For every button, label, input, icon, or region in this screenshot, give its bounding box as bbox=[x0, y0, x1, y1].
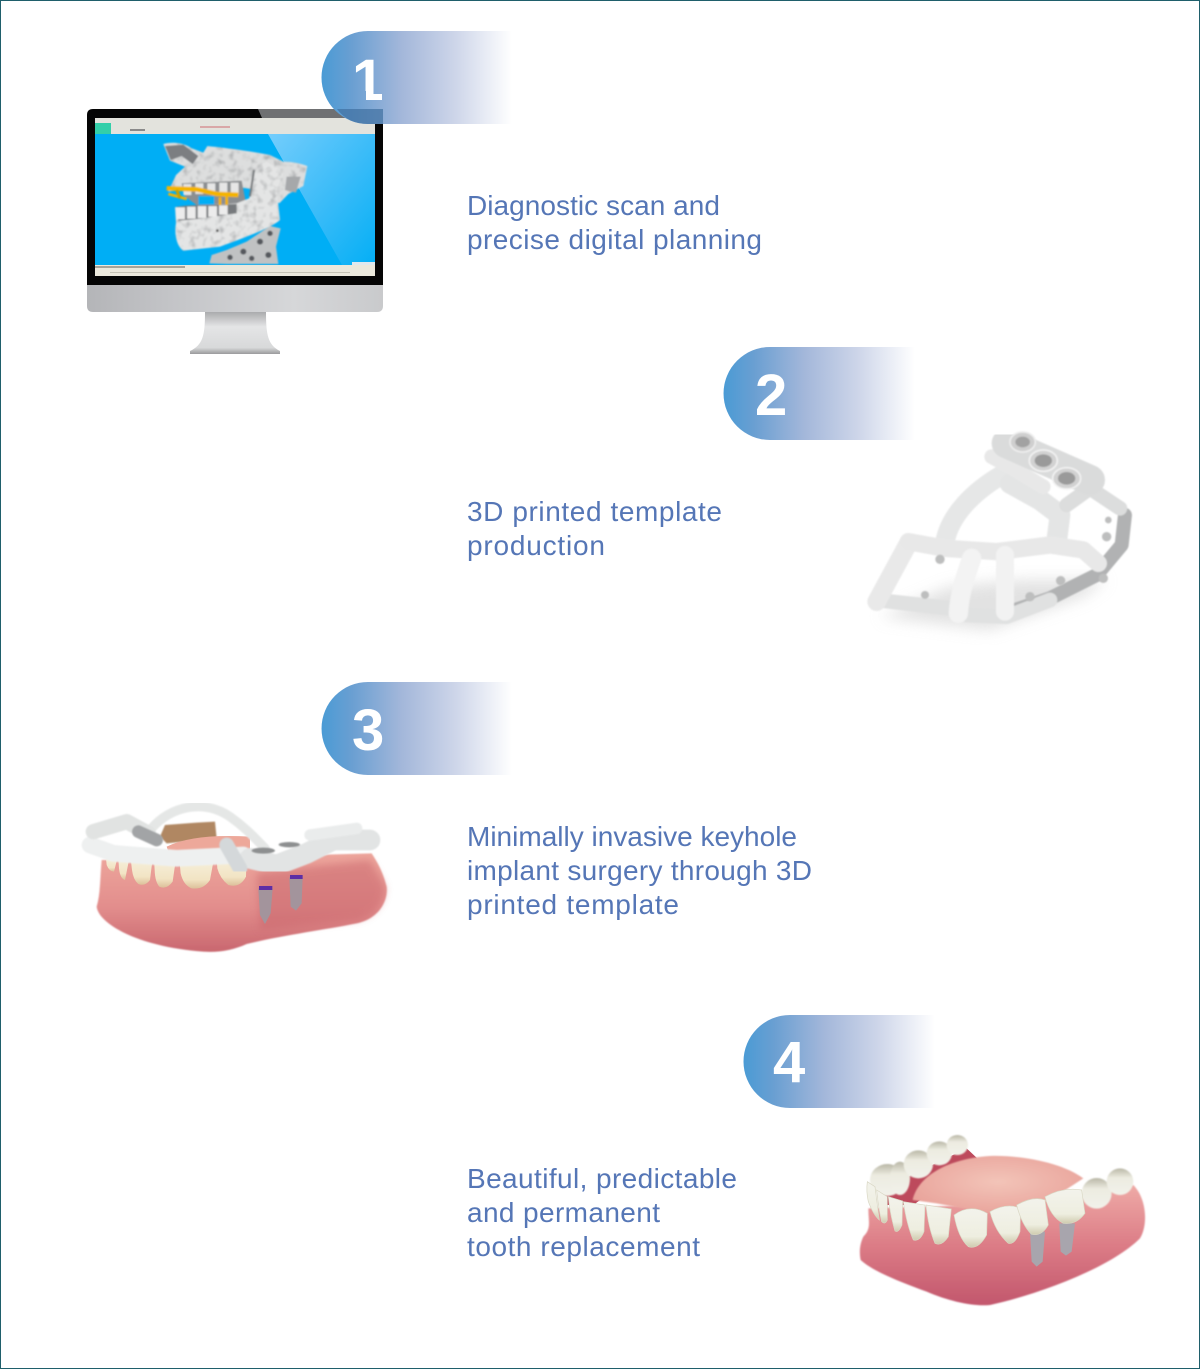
upper teeth bbox=[182, 181, 247, 207]
step 1 text: precise digital planning bbox=[467, 224, 762, 255]
monitor stand bbox=[190, 312, 280, 354]
3D skull scan bbox=[163, 143, 307, 264]
step 2 text: production bbox=[467, 530, 605, 561]
step 2 text: 3D printed template bbox=[467, 496, 722, 527]
step 4 text bbox=[467, 1163, 737, 1262]
back teeth arches bbox=[870, 1135, 1133, 1209]
upper skull bbox=[163, 143, 307, 203]
monitor chin bbox=[87, 285, 383, 312]
overlap of badge on monitor bbox=[337, 109, 383, 124]
transparent template overlay bbox=[90, 807, 370, 868]
implants bbox=[258, 875, 303, 924]
front teeth bbox=[867, 1182, 1085, 1247]
number 4: 4 bbox=[773, 1030, 805, 1095]
template shadow bbox=[880, 580, 1107, 630]
gum block bbox=[860, 1185, 1145, 1305]
neck vertebrae bbox=[209, 226, 281, 264]
monitor bezel bbox=[87, 109, 383, 285]
step 2 text bbox=[467, 496, 722, 561]
yellow surgical guide bbox=[167, 188, 238, 205]
step 4 text: and permanent bbox=[467, 1197, 660, 1228]
step 4 text: tooth replacement bbox=[467, 1231, 700, 1262]
step 3 text: printed template bbox=[467, 889, 679, 920]
monitor screen bbox=[95, 118, 375, 276]
step 3 text: implant surgery through 3D bbox=[467, 855, 812, 886]
number 3: 3 bbox=[352, 698, 384, 763]
template sleeves bbox=[252, 842, 300, 854]
tan back teeth bbox=[160, 822, 217, 843]
step 3 badge bbox=[322, 682, 512, 775]
illustration: template placed on lower jaw model bbox=[90, 807, 387, 952]
illustration: lower jaw with implant-supported teeth bbox=[860, 1135, 1145, 1305]
illustration: 3D printed surgical template bbox=[877, 432, 1125, 630]
illustration: desktop monitor with 3D jaw scan bbox=[87, 109, 383, 354]
step 1 text: Diagnostic scan and bbox=[467, 190, 720, 221]
tongue bbox=[913, 1156, 1083, 1213]
metal sleeves bbox=[1010, 432, 1081, 489]
number 2: 2 bbox=[755, 363, 787, 428]
step 1 text bbox=[467, 190, 762, 255]
hole in front plate bbox=[1078, 509, 1106, 537]
arch frame bbox=[877, 443, 1125, 617]
mandible bbox=[175, 162, 284, 251]
step 2 badge bbox=[724, 347, 915, 440]
step 1 badge bbox=[322, 31, 512, 124]
step 4 badge bbox=[743, 1015, 935, 1108]
number 1: 1 bbox=[352, 48, 384, 113]
step 3 text bbox=[467, 821, 812, 920]
step 4 text: Beautiful, predictable bbox=[467, 1163, 737, 1194]
arch nubs bbox=[921, 517, 1112, 601]
front teeth bbox=[106, 857, 247, 889]
implants bbox=[1030, 1223, 1075, 1267]
gum block bbox=[97, 853, 387, 952]
step 3 text: Minimally invasive keyhole bbox=[467, 821, 797, 852]
